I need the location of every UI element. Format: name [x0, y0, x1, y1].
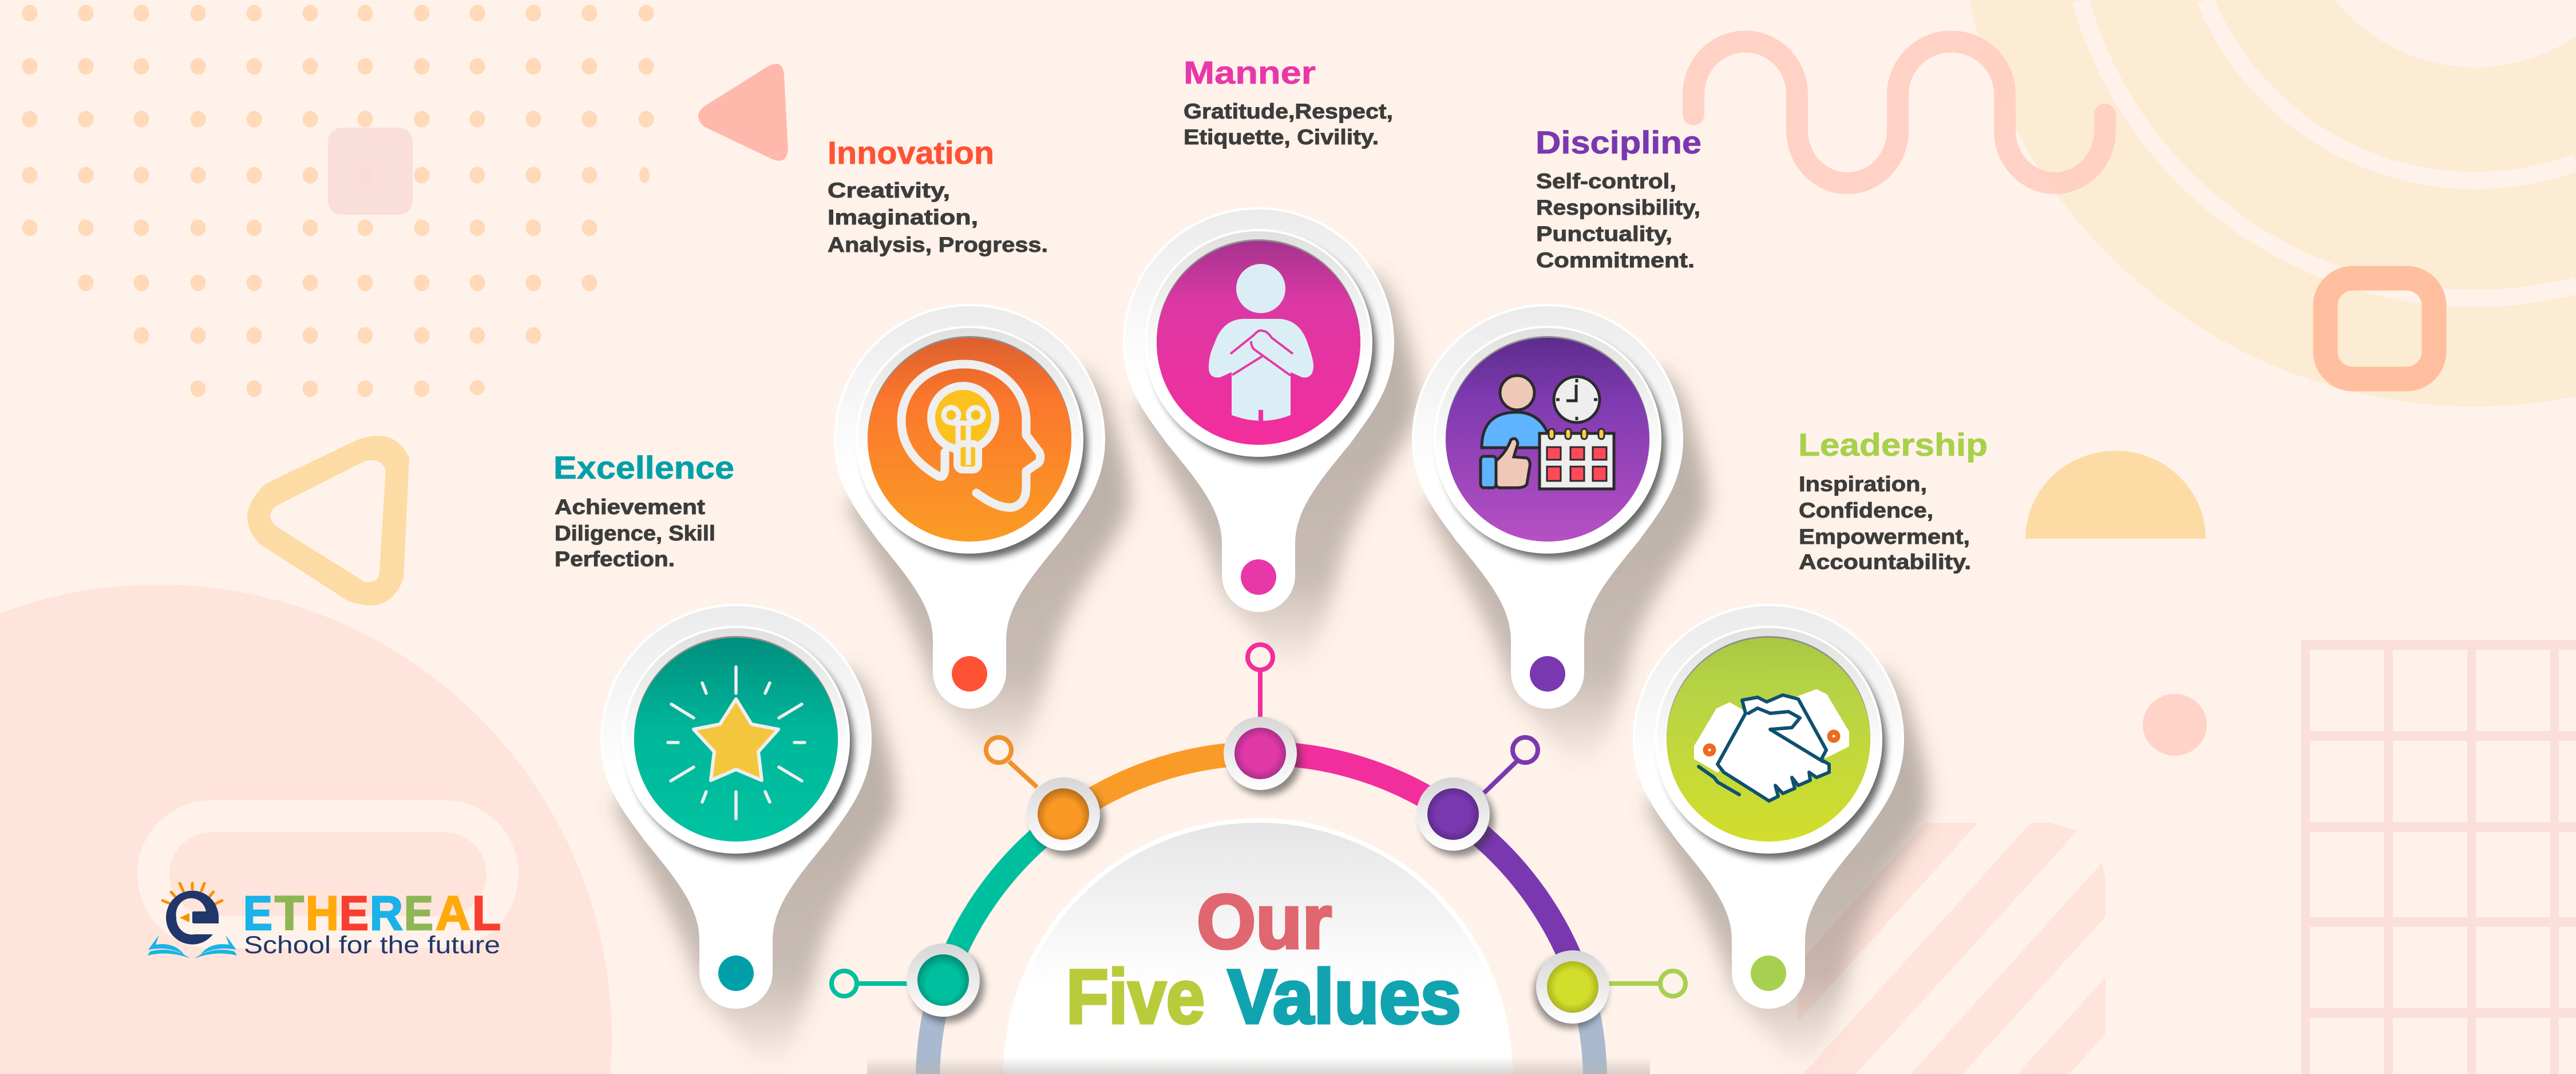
logo tagline: School for the future: [244, 931, 500, 959]
title: Our Five Values: Five: [1066, 954, 1205, 1040]
decoration: peach circle: [2143, 694, 2207, 756]
text block: innovation: Creativity,: [828, 179, 950, 202]
text block: discipline: [1536, 124, 1701, 272]
logo wordmark: E: [404, 886, 433, 940]
dome: [1006, 820, 1510, 1074]
text block: manner: [1184, 54, 1393, 149]
decoration: orange rounded square outline: [2325, 278, 2434, 379]
decoration: yellow half circle: [2025, 451, 2206, 539]
text block: excellence: Perfection.: [555, 547, 675, 571]
text block: leadership: Accountability.: [1799, 550, 1971, 574]
text block: innovation: Analysis, Progress.: [828, 233, 1048, 256]
decoration: top-right concentric circles: [1969, 0, 2576, 406]
text block: manner: Gratitude,Respect,: [1184, 100, 1393, 123]
title: Our Five Values: [1066, 879, 1461, 1040]
text block: manner: Etiquette, Civility.: [1184, 125, 1379, 149]
logo wordmark: T: [275, 886, 304, 940]
decoration: yellow triangle outline: [247, 436, 409, 606]
logo wordmark: H: [306, 886, 339, 940]
panel: manner marker: [1124, 208, 1418, 674]
panel: discipline marker: [1413, 305, 1707, 771]
decoration: large pink circle: [0, 585, 612, 1074]
text block: manner: Manner: [1184, 54, 1316, 90]
text block: discipline: Responsibility,: [1536, 196, 1700, 219]
text block: leadership: Leadership: [1798, 427, 1988, 463]
decoration: stadium ring behind logo: [153, 816, 502, 932]
icon: open book: [148, 935, 237, 958]
text block: excellence: Achievement: [555, 495, 705, 519]
text block: leadership: Confidence,: [1799, 499, 1933, 522]
icon: letter e: [166, 891, 219, 945]
text block: discipline: Commitment.: [1536, 248, 1695, 272]
panel: innovation marker: [835, 305, 1129, 771]
panel: leadership marker: [1634, 605, 1928, 1071]
decoration: wave line: [1693, 41, 2105, 183]
logo wordmark: R: [370, 886, 403, 940]
icon: star: [668, 667, 805, 819]
text block: innovation: Innovation: [828, 135, 994, 171]
nodes on arc: [907, 717, 1609, 1028]
text block: excellence: [553, 449, 734, 571]
title: Our Five Values: Our: [1197, 879, 1332, 965]
icon: sun rays: [163, 883, 222, 904]
text block: excellence: Excellence: [553, 449, 734, 485]
decoration: coral triangle: [698, 64, 788, 161]
text block: leadership: [1798, 427, 1988, 574]
logo wordmark: [243, 886, 501, 940]
title: Our Five Values: Values: [1228, 954, 1461, 1040]
floor shadow strip: [867, 1057, 1650, 1074]
text block: excellence: Diligence, Skill: [555, 522, 715, 545]
logo wordmark: L: [472, 886, 501, 940]
icon: person, clock, calendar, thumbs up: [1481, 376, 1614, 489]
icon: head with light bulb: [901, 364, 1040, 507]
logo: Ethereal School for the future: [148, 883, 501, 959]
panel: excellence marker: [602, 605, 896, 1071]
text block: innovation: [828, 135, 1048, 256]
icon: orange triangle: [180, 913, 189, 922]
text block: innovation: Imagination,: [828, 206, 978, 229]
logo wordmark: E: [243, 886, 272, 940]
icon: handshake: [1696, 691, 1847, 801]
decoration: diagonal stripes: [1798, 823, 2106, 1074]
icon: person with crossed arms: [1209, 264, 1313, 421]
text block: discipline: Punctuality,: [1536, 222, 1672, 246]
decoration: dot grid: [22, 5, 654, 397]
chart: coloured arc: [928, 753, 1595, 1074]
text block: leadership: Empowerment,: [1799, 525, 1970, 548]
decoration: grid: [2301, 640, 2576, 1074]
text block: leadership: Inspiration,: [1799, 472, 1927, 496]
text block: discipline: Discipline: [1536, 124, 1701, 160]
text block: discipline: Self-control,: [1536, 169, 1676, 193]
decoration: pink rounded square: [328, 128, 413, 215]
connectors with rings: [832, 645, 1685, 996]
logo wordmark: A: [436, 886, 470, 940]
logo wordmark: E: [339, 886, 369, 940]
